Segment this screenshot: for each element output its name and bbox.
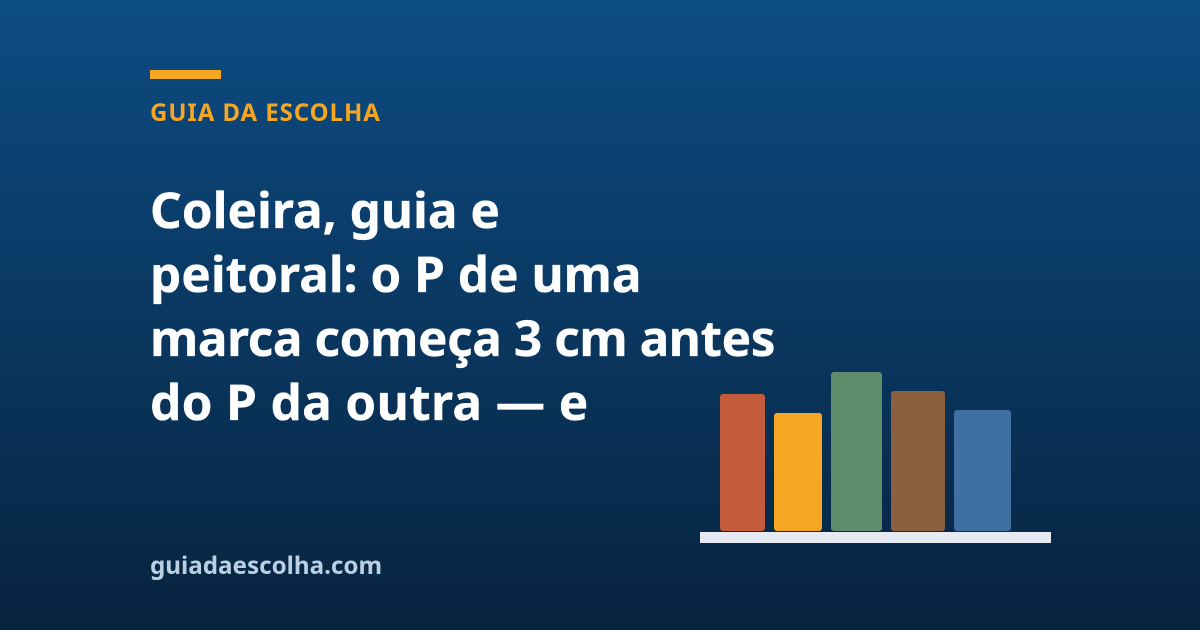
shelf — [700, 532, 1051, 543]
book: red — [720, 394, 765, 531]
book: brown — [891, 391, 945, 531]
book: blue — [954, 410, 1011, 531]
title: Coleira, guia e — [150, 174, 500, 242]
book: green — [831, 372, 882, 531]
title: do P da outra — e — [150, 366, 589, 434]
title: peitoral: o P de uma — [150, 238, 642, 306]
eyebrow label: GUIA DA ESCOLHA — [150, 96, 381, 129]
book: amber — [774, 413, 822, 531]
site url: guiadaescolha.com — [150, 549, 382, 582]
title: marca começa 3 cm antes — [150, 302, 775, 370]
illustration: books on shelf — [700, 372, 1051, 543]
accent bar — [150, 70, 221, 79]
title — [150, 174, 775, 434]
